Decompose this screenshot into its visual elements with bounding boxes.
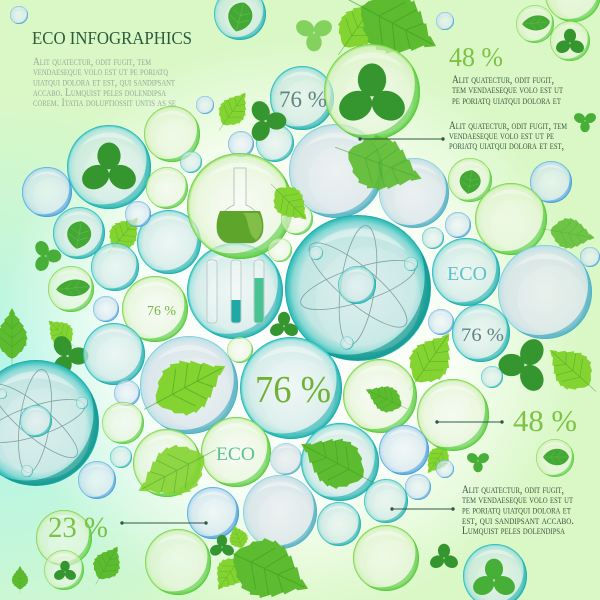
bubble: small green over flask: [281, 203, 313, 235]
leaf by flask: [260, 173, 318, 231]
bubble: test tubes: [187, 243, 283, 339]
label: 76 percent large: 76 %: [255, 369, 331, 411]
bubble: blue small centre right: [428, 309, 454, 335]
bubble: big leaf: [140, 336, 238, 434]
bubble: grey centre right: [379, 158, 449, 228]
bubble: flask: [187, 153, 293, 259]
bubble: green with leaf: [133, 429, 201, 497]
bubble: blue bottom: [187, 487, 239, 539]
stat: 48 percent top: 48 %: [449, 42, 503, 72]
leaf: behind small blue bubble: [419, 437, 458, 479]
leaf in teal bubble: [289, 422, 386, 505]
bubble: teal bottom: [317, 502, 361, 546]
clover: right dark: [498, 335, 548, 395]
connector paragraph: [391, 508, 454, 510]
connector 23 percent: [121, 522, 207, 524]
text block: top right one: Alit quatectur, odit fugit,: [452, 74, 554, 86]
bubble: top right clover: [550, 21, 590, 61]
bottom clover: [208, 535, 236, 558]
text block: bottom right: Lumquist peles dolendipsa: [462, 525, 565, 537]
clover: top pale: [293, 17, 335, 51]
intro text: uiatqui dolora et est, qui sandipsant: [33, 76, 175, 88]
intro text: accabo. Lumquist peles dolendipsa: [33, 87, 166, 99]
bubble: blue left: [22, 167, 72, 217]
connector top: [359, 138, 444, 140]
bubble: pale green right: [475, 183, 547, 255]
leaf in left bubble: [65, 219, 93, 251]
label: 76 percent teal right: 76 %: [461, 325, 504, 346]
text block: top right two: poriatq uiatqui dolora et est,: [449, 140, 564, 152]
bubble: blue small top: [228, 131, 254, 157]
bubble: small teal: [180, 151, 202, 173]
bubble: atom left: [0, 360, 99, 486]
text block: bottom right: Alit quatectur, odit fugit,: [462, 484, 564, 496]
clover in small bubble: [52, 561, 78, 582]
clover upper centre dark: [248, 98, 286, 144]
clover in top centre bubble: [334, 63, 410, 126]
label: ECO green: ECO: [216, 444, 255, 465]
bubble: green bottom: [353, 525, 419, 591]
bottom large leaf: [208, 521, 321, 600]
text block: top right one: pe poriatq uiatqui dolora et: [452, 95, 561, 107]
clover: right pale lower: [465, 451, 491, 472]
bubble: top left blue: [10, 6, 28, 24]
bubble: top leaf: [214, 0, 266, 40]
text block: top right two: [449, 120, 567, 152]
bubble: blue edge right: [580, 247, 600, 267]
bubble: blue bottom left: [78, 461, 116, 499]
leaf: far left lower: [0, 308, 28, 368]
bubble: blue small: [93, 296, 119, 322]
leaf in lower left bubble: [55, 278, 91, 298]
bottom tiny leaf: [225, 522, 252, 555]
bubble: 76 percent green: [122, 276, 188, 342]
bubble: large teal left: [137, 210, 201, 274]
bubble: small blue: [196, 96, 214, 114]
bubble: green bottom left: [145, 529, 211, 595]
bottom pale leaf: [206, 546, 255, 598]
bubble: teal: [91, 243, 139, 291]
bubble: small grey: [270, 443, 302, 475]
bubble: pale green: [144, 106, 200, 162]
tube 3: [254, 260, 264, 323]
bubble: ECO teal: [432, 238, 500, 306]
stat: 48 percent bottom: 48 %: [513, 403, 577, 438]
text block: top right two: Alit quatectur, odit fugit, tem: [449, 120, 567, 132]
bubble: top right leaf: [516, 5, 554, 43]
clover: atom top dark: [50, 333, 88, 379]
intro text: corem. Itatia doluptiossit untis as se: [33, 97, 176, 109]
leaf: bottom small: [84, 540, 129, 591]
bubble: blue small: [114, 380, 140, 406]
icon: flask: [217, 168, 263, 243]
stat: 23 percent: 23 %: [48, 511, 108, 544]
bubble: 23 percent: [36, 510, 92, 566]
bubble: pale green tiny: [227, 337, 253, 363]
leaf in top bubble: [225, 0, 255, 35]
bubble: 76 percent large: [240, 337, 342, 439]
leaf: atom top pale: [40, 312, 83, 355]
leaf: right of 76 percent: [393, 322, 466, 402]
text block: bottom right: pe poriatq uiatqui dolora et: [462, 504, 571, 516]
bubble: teal centre left: [83, 323, 145, 385]
bubble: grey bottom: [243, 475, 317, 549]
leaf: bottom corner tiny: [12, 566, 28, 594]
text block: bottom right: tem vendaeseque volo est ut: [462, 494, 573, 506]
text block: bottom right: est, qui sandipsant accabo.: [462, 515, 574, 527]
leaf: small upper centre: [208, 85, 257, 138]
bubble: leaf left: [53, 207, 105, 259]
bubble: teal upper centre: [256, 124, 294, 162]
bubble: leaf centre right: [343, 359, 417, 433]
clover in bottom right bubble: [470, 559, 518, 599]
bubble: green small right: [536, 439, 574, 477]
bubble: clover bottom right: [463, 544, 527, 600]
tube 2: [231, 260, 241, 323]
bubble: small blue right: [445, 212, 471, 238]
text block: top right one: tem vendaeseque volo est ut: [452, 84, 563, 96]
bubble: grey large right: [498, 245, 592, 339]
bubble: clover top centre: [324, 44, 420, 140]
text block: bottom right: [462, 484, 574, 537]
intro text: [33, 56, 176, 109]
bubble: atom large: [285, 215, 431, 361]
bubble: 76 percent teal right: [452, 304, 510, 362]
tube 1: [207, 260, 217, 323]
bubble: blue top: [436, 12, 454, 30]
clover: right pale upper: [572, 111, 598, 132]
text block: top right one: [452, 74, 563, 107]
leaf: far right: [537, 335, 600, 406]
bubble: clover left: [67, 125, 151, 209]
leaf: top large: [334, 0, 451, 74]
bubble: small teal right: [422, 227, 444, 249]
label: ECO teal: ECO: [447, 263, 487, 285]
label: 76 percent top: 76 %: [279, 87, 327, 112]
leaf: left of teal bubble: [97, 208, 149, 262]
bubble: blue centre: [379, 425, 429, 475]
label: 76 percent green small: 76 %: [147, 304, 176, 319]
bubble: teal leaf: [301, 423, 379, 501]
bubble: leaf right: [448, 158, 492, 202]
leaf in green centre bubble: [360, 378, 413, 421]
clover near tubes: [268, 312, 300, 338]
leaf in right bubble: [458, 168, 482, 196]
bubble: ECO green: [201, 417, 271, 487]
title: ECO INFOGRAPHICS: [32, 28, 192, 48]
text block: top right two: vendaeseque volo est ut pe: [449, 130, 554, 142]
icon: atom left: [0, 367, 89, 477]
clover: bottom dark: [428, 544, 460, 570]
clover in left bubble: [78, 142, 140, 194]
leaf in small right bubble: [543, 449, 569, 465]
bubble: teal small right: [481, 366, 503, 388]
bubble: green small: [102, 402, 144, 444]
leaf overlapping grey bubbles: [326, 121, 431, 205]
bubble: blue right: [530, 161, 572, 203]
connector 48 percent: [436, 421, 503, 423]
intro text: Alit quatectur, odit fugit, tem: [33, 56, 151, 68]
bubble: blue tiny: [436, 460, 454, 478]
bubble: clover small: [44, 550, 84, 590]
icon: test tubes: [207, 260, 264, 323]
clover in top right bubble: [554, 29, 586, 55]
bubble: small green: [146, 167, 188, 209]
bubble: blue small left: [125, 201, 151, 227]
leaf: top pale: [323, 0, 392, 66]
leaf in green bubble: [127, 428, 227, 513]
bubble: tiny green: [268, 238, 292, 262]
big leaf in bubble: [131, 342, 238, 434]
leaf in pale right bubble: [540, 213, 597, 253]
bubble: teal tiny: [110, 446, 132, 468]
intro text: vendaeseque volo est ut pe poriatq: [33, 66, 168, 78]
icon: atom large: [296, 223, 420, 350]
clover: far left: [33, 239, 61, 273]
bubble: top right corner: [545, 0, 600, 22]
bubble: 76 percent teal top: [270, 66, 334, 130]
bubble: big grey centre: [289, 124, 383, 218]
bubble: blue small: [405, 474, 431, 500]
bubble: leaf lower left: [48, 266, 94, 312]
bubble: 48 percent green: [417, 379, 489, 451]
leaf in top right bubble: [521, 14, 551, 32]
bubble: teal line anchor: [364, 479, 408, 523]
connector lines: [121, 138, 503, 524]
